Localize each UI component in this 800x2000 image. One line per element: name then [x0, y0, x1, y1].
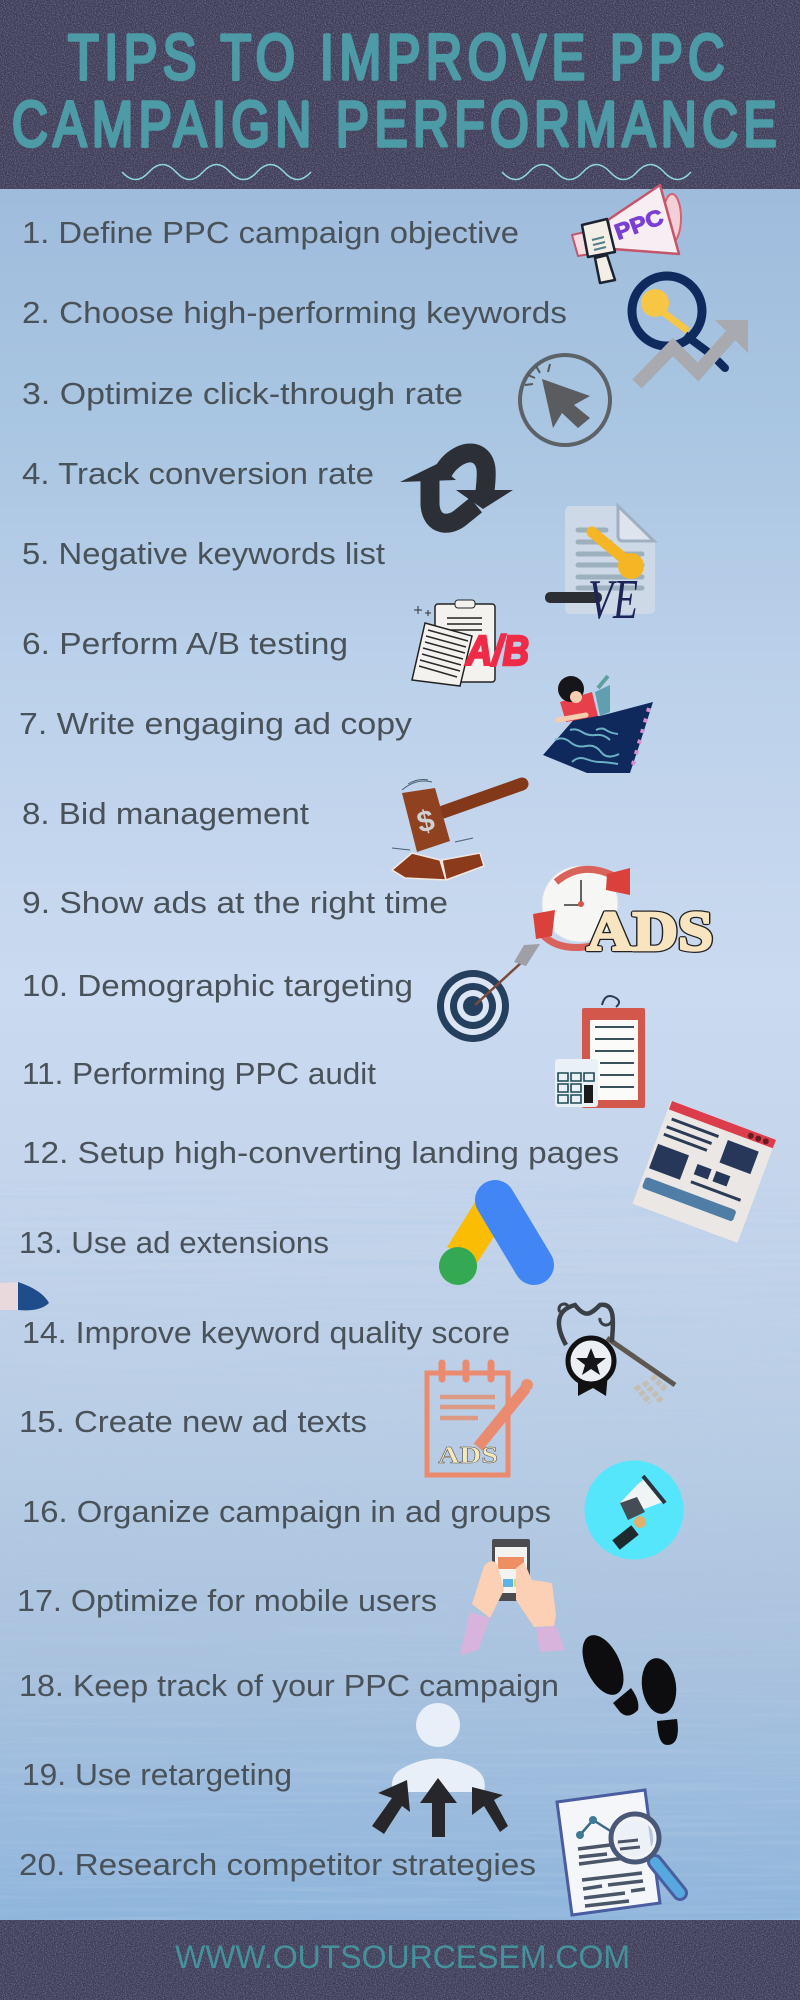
icon: megaphone in cyan circle	[584, 1460, 684, 1560]
icon: quality score key and badge	[559, 1304, 675, 1403]
icon: target with arrow	[437, 944, 540, 1042]
footer website address: WWW.OUTSOURCESEM.COM	[175, 1939, 630, 1975]
tip 12: 12. Setup high-converting landing pages	[22, 1135, 619, 1170]
icon: bid gavel	[392, 780, 522, 880]
tip 18: 18. Keep track of your PPC campaign	[19, 1668, 559, 1703]
tip 13: 13. Use ad extensions	[19, 1225, 329, 1260]
icon: A/B testing documents	[412, 600, 529, 686]
icon: click cursor	[520, 355, 610, 445]
tip 3: 3. Optimize click-through rate	[22, 376, 463, 411]
tip 19: 19. Use retargeting	[22, 1757, 292, 1792]
tip 5: 5. Negative keywords list	[22, 536, 385, 571]
decorative wave right	[502, 164, 691, 180]
tip 20: 20. Research competitor strategies	[19, 1847, 536, 1882]
icon: person writing ad copy	[543, 676, 653, 773]
icon: notepad with pencil and ADS: ADS	[438, 1443, 498, 1469]
ADS lettering: ADS	[587, 901, 713, 963]
icon: footprints	[574, 1629, 680, 1745]
icon: clipboard audit with calculator	[555, 996, 645, 1108]
tip 11: 11. Performing PPC audit	[22, 1056, 376, 1091]
tip 7: 7. Write engaging ad copy	[19, 706, 413, 741]
tip 6: 6. Perform A/B testing	[22, 626, 348, 661]
tip 16: 16. Organize campaign in ad groups	[22, 1494, 551, 1529]
icon: bid gavel: $	[414, 804, 438, 840]
icon: clock with ADS lettering	[533, 866, 713, 963]
icon: retargeting person with arrows	[372, 1703, 508, 1837]
tip 14: 14. Improve keyword quality score	[22, 1315, 510, 1350]
panel: footer band	[0, 1920, 800, 2000]
tip 1: 1. Define PPC campaign objective	[22, 215, 519, 250]
icon: Google Ads logo	[439, 1199, 534, 1285]
icon: competitor research document	[557, 1790, 680, 1915]
tip 8: 8. Bid management	[22, 796, 309, 831]
tip 4: 4. Track conversion rate	[22, 456, 374, 491]
ADS lettering: ADS	[587, 901, 713, 963]
tips list	[17, 215, 619, 1882]
tip 10: 10. Demographic targeting	[22, 968, 413, 1003]
tip 9: 9. Show ads at the right time	[22, 885, 448, 920]
icon: stray cropped shape at left edge	[0, 1282, 49, 1310]
tip 15: 15. Create new ad texts	[19, 1404, 367, 1439]
icon: negative keyword document	[545, 506, 655, 631]
icon: magnifier with key and growth arrow	[632, 276, 748, 384]
icon: megaphone	[572, 185, 681, 283]
icon: hands holding phone	[460, 1539, 565, 1655]
tip 2: 2. Choose high-performing keywords	[22, 295, 567, 330]
title	[12, 21, 782, 160]
decorative wave left	[122, 164, 311, 180]
icon: negative keyword document: VE	[588, 569, 638, 631]
icon: megaphone: PPC	[611, 204, 667, 245]
icon: A/B testing documents: A/B	[465, 627, 529, 674]
icon: landing page window	[633, 1101, 776, 1243]
panel: header band	[0, 0, 800, 189]
tip 17: 17. Optimize for mobile users	[17, 1583, 437, 1618]
icon: notepad with pencil and ADS	[427, 1363, 533, 1475]
icon: cycle arrows	[400, 453, 513, 523]
